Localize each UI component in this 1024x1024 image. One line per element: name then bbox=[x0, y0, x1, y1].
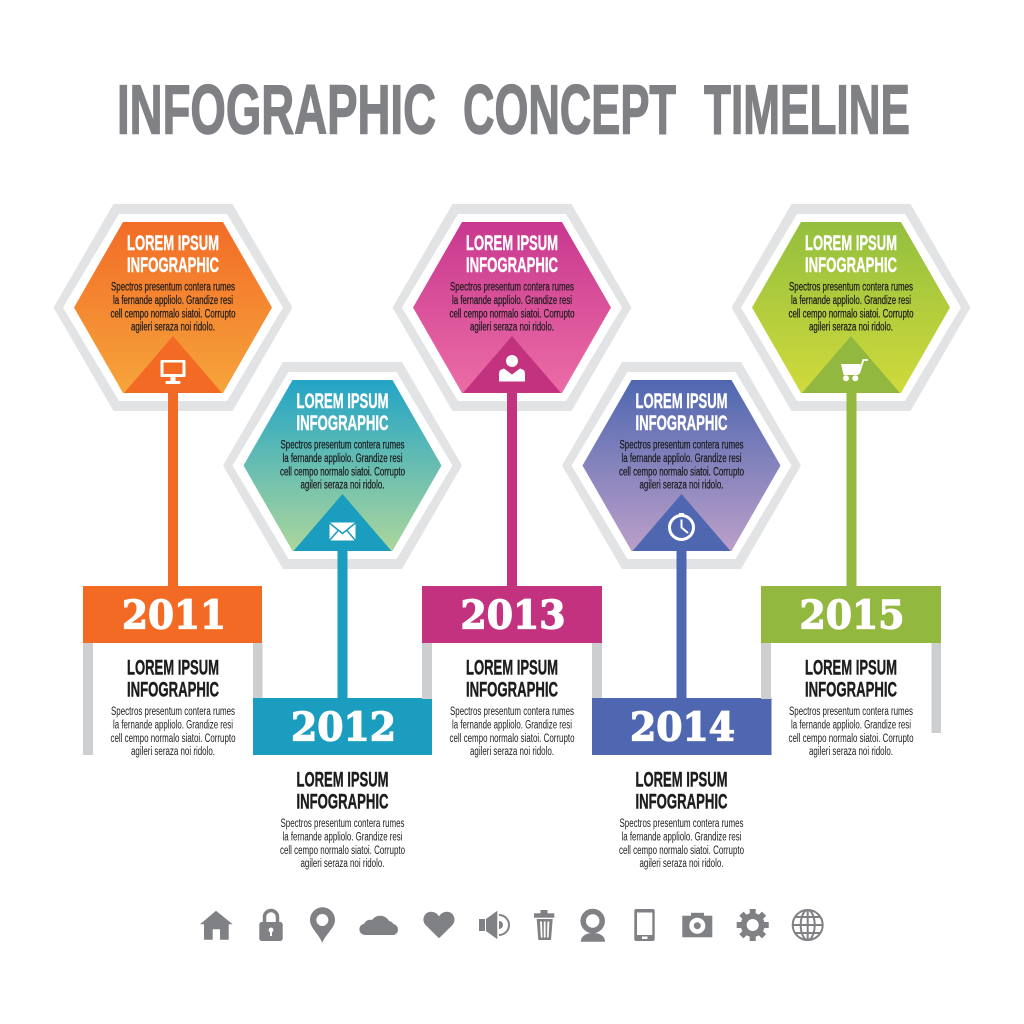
panel: 2014 hexagon: INFOGRAPHIC bbox=[636, 412, 728, 435]
text block 2012: Spectros presentum contera rumes bbox=[280, 818, 405, 830]
icon row bbox=[200, 907, 823, 943]
panel: 2012 hexagon bbox=[223, 362, 462, 569]
panel: 2013 hexagon: cell cempo normalo siatoi. Corrupto bbox=[450, 308, 574, 320]
text block 2011: Spectros presentum contera rumes bbox=[111, 706, 235, 718]
text block 2011: la fernande appliolo. Grandize resi bbox=[113, 720, 233, 732]
year box 2013 bbox=[422, 586, 602, 643]
year box 2014: 2014 bbox=[630, 704, 735, 750]
text block 2014: INFOGRAPHIC bbox=[636, 790, 728, 814]
text block 2014: cell cempo normalo siatoi. Corrupto bbox=[619, 845, 744, 857]
panel: 2014 hexagon: agileri seraza noi ridolo. bbox=[640, 480, 724, 492]
text block 2014: agileri seraza noi ridolo. bbox=[640, 858, 724, 870]
text block 2012: agileri seraza noi ridolo. bbox=[300, 858, 384, 870]
icon: person bbox=[499, 355, 525, 382]
text block 2012: LOREM IPSUM bbox=[296, 768, 388, 792]
panel: 2014 hexagon bbox=[562, 362, 801, 569]
text block 2011: agileri seraza noi ridolo. bbox=[131, 746, 215, 758]
panel: 2011 hexagon: INFOGRAPHIC bbox=[127, 254, 219, 277]
text block 2013: cell cempo normalo siatoi. Corrupto bbox=[450, 733, 574, 745]
icon: speaker bbox=[479, 911, 509, 939]
panel: 2013 hexagon: agileri seraza noi ridolo. bbox=[470, 322, 554, 334]
text block 2013: la fernande appliolo. Grandize resi bbox=[452, 720, 572, 732]
stem 2011 bbox=[168, 393, 178, 587]
panel: 2013 hexagon: LOREM IPSUM bbox=[466, 232, 558, 255]
title: INFOGRAPHIC bbox=[117, 70, 436, 148]
text block 2015 bbox=[788, 656, 914, 758]
text block 2013 bbox=[450, 656, 574, 758]
year box 2014 bbox=[592, 698, 772, 755]
text block 2015: cell cempo normalo siatoi. Corrupto bbox=[788, 733, 914, 745]
text block 2011: cell cempo normalo siatoi. Corrupto bbox=[110, 733, 236, 745]
text block 2014 bbox=[619, 768, 744, 870]
icon: map pin bbox=[310, 907, 335, 943]
panel: 2011 hexagon: LOREM IPSUM bbox=[127, 232, 219, 255]
icon: shopping cart bbox=[841, 360, 868, 381]
panel: 2012 hexagon: cell cempo normalo siatoi. Corrupto bbox=[280, 466, 405, 478]
text block 2012: cell cempo normalo siatoi. Corrupto bbox=[280, 845, 405, 857]
stem 2013 bbox=[507, 393, 517, 587]
year box 2011: 2011 bbox=[122, 592, 226, 638]
panel: 2012 hexagon: Spectros presentum contera rumes bbox=[280, 440, 405, 452]
icon: trash can bbox=[534, 910, 554, 940]
panel: 2013 hexagon: INFOGRAPHIC bbox=[466, 254, 558, 277]
panel: 2014 hexagon: cell cempo normalo siatoi. Corrupto bbox=[619, 466, 744, 478]
panel: 2015 hexagon bbox=[732, 204, 970, 411]
panel: 2015 hexagon: INFOGRAPHIC bbox=[805, 254, 897, 277]
text block 2015: LOREM IPSUM bbox=[805, 656, 897, 680]
panel: 2015 hexagon: agileri seraza noi ridolo. bbox=[809, 322, 893, 334]
text block 2015: Spectros presentum contera rumes bbox=[789, 706, 913, 718]
panel: 2015 hexagon: LOREM IPSUM bbox=[805, 232, 897, 255]
year box 2015: 2015 bbox=[800, 592, 904, 638]
title: CONCEPT bbox=[463, 70, 676, 148]
panel: 2014 hexagon: Spectros presentum contera rumes bbox=[620, 440, 744, 452]
icon: monitor bbox=[160, 360, 186, 384]
panel: 2012 hexagon: INFOGRAPHIC bbox=[296, 412, 388, 435]
text block 2014: LOREM IPSUM bbox=[636, 768, 728, 792]
text block 2011: INFOGRAPHIC bbox=[127, 678, 219, 702]
text block 2011: LOREM IPSUM bbox=[127, 656, 219, 680]
text block 2013: agileri seraza noi ridolo. bbox=[470, 746, 554, 758]
panel: 2012 hexagon: agileri seraza noi ridolo. bbox=[300, 480, 384, 492]
text block 2015: agileri seraza noi ridolo. bbox=[809, 746, 893, 758]
icon: envelope bbox=[330, 522, 356, 540]
panel: 2011 hexagon: agileri seraza noi ridolo. bbox=[131, 322, 215, 334]
bracket bars 2013 bbox=[422, 643, 602, 699]
title: TIMELINE bbox=[704, 70, 910, 148]
icon: heart bbox=[423, 912, 455, 938]
year box 2015 bbox=[761, 586, 941, 643]
stem 2015 bbox=[846, 393, 856, 587]
panel: 2015 hexagon: la fernande appliolo. Grandize resi bbox=[791, 295, 911, 307]
panel: 2015 hexagon: Spectros presentum contera rumes bbox=[789, 282, 913, 294]
year box 2013: 2013 bbox=[460, 592, 566, 638]
text block 2015: INFOGRAPHIC bbox=[805, 678, 897, 702]
panel: 2011 hexagon: Spectros presentum contera rumes bbox=[111, 282, 235, 294]
text block 2014: la fernande appliolo. Grandize resi bbox=[622, 832, 742, 844]
text block 2013: INFOGRAPHIC bbox=[466, 678, 558, 702]
text block 2015: la fernande appliolo. Grandize resi bbox=[791, 720, 911, 732]
icon: globe bbox=[793, 910, 823, 940]
panel: 2011 hexagon: la fernande appliolo. Grandize resi bbox=[113, 295, 233, 307]
icon: cloud bbox=[359, 916, 398, 935]
text block 2014: Spectros presentum contera rumes bbox=[620, 818, 744, 830]
icon: stopwatch bbox=[670, 513, 694, 540]
icon: smartphone bbox=[634, 909, 655, 941]
year box 2012: 2012 bbox=[291, 704, 396, 750]
icon: padlock bbox=[259, 911, 283, 941]
text block 2012 bbox=[280, 768, 405, 870]
panel: 2013 hexagon: la fernande appliolo. Grandize resi bbox=[452, 295, 572, 307]
panel: 2012 hexagon: la fernande appliolo. Grandize resi bbox=[282, 453, 402, 465]
bracket bars 2015 bbox=[761, 643, 941, 733]
text block 2011 bbox=[110, 656, 236, 758]
year box 2011 bbox=[83, 586, 262, 643]
panel: 2014 hexagon: la fernande appliolo. Grandize resi bbox=[622, 453, 742, 465]
stem 2014 bbox=[676, 551, 686, 699]
panel: 2012 hexagon: LOREM IPSUM bbox=[296, 390, 388, 413]
panel: 2014 hexagon: LOREM IPSUM bbox=[636, 390, 728, 413]
text block 2012: la fernande appliolo. Grandize resi bbox=[282, 832, 402, 844]
icon: house bbox=[200, 911, 233, 940]
text block 2012: INFOGRAPHIC bbox=[296, 790, 388, 814]
stem 2012 bbox=[338, 551, 348, 699]
icon: webcam bbox=[581, 912, 605, 942]
panel: 2011 hexagon: cell cempo normalo siatoi. Corrupto bbox=[110, 308, 236, 320]
panel: 2011 hexagon bbox=[54, 204, 292, 411]
panel: 2013 hexagon bbox=[392, 204, 632, 411]
panel: 2013 hexagon: Spectros presentum contera rumes bbox=[450, 282, 574, 294]
panel: 2015 hexagon: cell cempo normalo siatoi. Corrupto bbox=[788, 308, 914, 320]
icon: gear bbox=[737, 909, 769, 941]
text block 2013: LOREM IPSUM bbox=[466, 656, 558, 680]
icon: camera bbox=[682, 913, 712, 937]
title bbox=[117, 70, 910, 148]
bracket bars 2011 bbox=[83, 643, 262, 755]
text block 2013: Spectros presentum contera rumes bbox=[450, 706, 574, 718]
year box 2012 bbox=[253, 698, 432, 755]
